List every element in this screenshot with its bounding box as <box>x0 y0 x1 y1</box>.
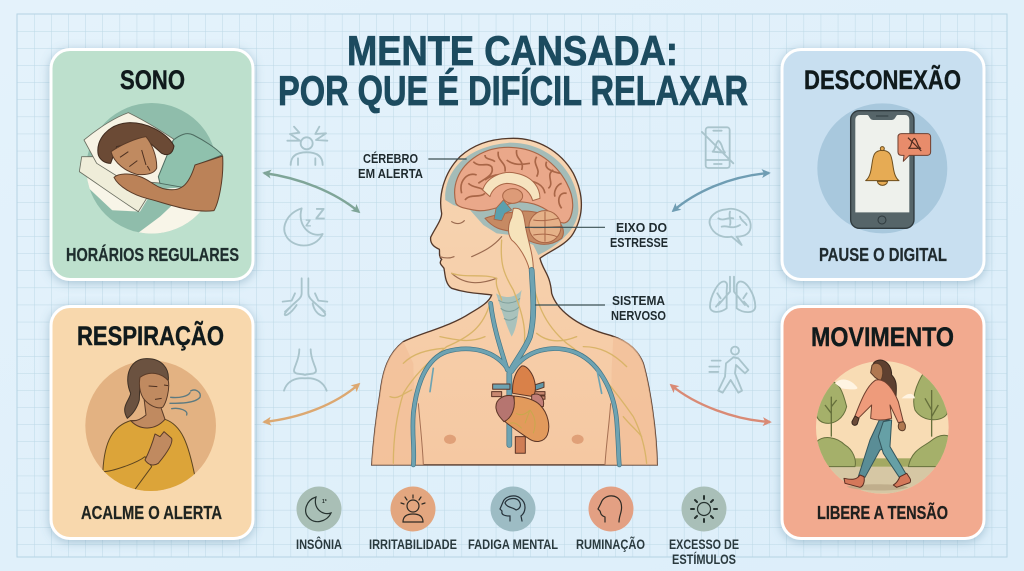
illustration: sleeping woman <box>79 103 227 240</box>
central anatomy figure <box>372 138 657 465</box>
heading: respiracao: RESPIRAÇÃO <box>77 320 224 351</box>
illustration: phone with muted bell <box>817 103 947 233</box>
panel: sono <box>51 50 253 280</box>
anatomy labels <box>358 151 668 323</box>
icon: nose <box>284 349 327 391</box>
icon: moon and zz: z <box>305 216 311 230</box>
symptom: irritabilidade <box>369 486 457 552</box>
face detail <box>440 221 502 283</box>
icon: airways <box>283 278 327 316</box>
symptom: insonia: 1* <box>322 499 327 505</box>
arm shading <box>372 337 657 465</box>
heading: sono: SONO <box>120 65 185 95</box>
anatomy labels: SISTEMA <box>612 294 665 308</box>
symptom: insonia <box>296 486 342 552</box>
nerves: blue trunks <box>413 270 619 465</box>
anatomy labels: CÉREBRO <box>363 151 418 166</box>
panel: desconexao <box>782 50 984 280</box>
symptom: insonia: INSÔNIA <box>296 537 342 552</box>
heart <box>492 366 549 453</box>
symptom: excesso de estimulos: ESTÍMULOS <box>672 552 736 567</box>
caption: acalme o alerta: ACALME O ALERTA <box>81 503 222 523</box>
nerves: yellow branches <box>390 240 647 463</box>
arrow: movimento to body <box>671 385 770 422</box>
heading: desconexao: DESCONEXÃO <box>804 64 961 95</box>
skull cavity <box>445 143 578 255</box>
leader lines <box>428 159 605 305</box>
trachea <box>496 290 522 337</box>
icon: moon and zz <box>284 204 325 245</box>
arrow: desconexao to head <box>673 173 769 211</box>
symptom: excesso de estimulos <box>669 486 739 567</box>
icon: lungs <box>710 277 755 312</box>
brain <box>455 147 573 269</box>
symptom: irritabilidade: IRRITABILIDADE <box>369 537 457 552</box>
caption: pause o digital: PAUSE O DIGITAL <box>819 245 947 265</box>
anatomy labels: ESTRESSE <box>610 236 668 250</box>
panel: respiracao <box>51 306 253 538</box>
anatomy labels: NERVOSO <box>611 309 666 323</box>
heading: movimento: MOVIMENTO <box>811 322 954 352</box>
faded icons: left column <box>283 127 327 391</box>
title <box>278 27 748 114</box>
nipples <box>444 435 584 444</box>
icon: moon and zz: Z <box>315 204 325 223</box>
anatomy labels: EM ALERTA <box>358 167 423 181</box>
icon: stressed person <box>287 127 327 165</box>
caption: horarios regulares: HORÁRIOS REGULARES <box>66 244 239 265</box>
caption: libere a tensao: LIBERE A TENSÃO <box>817 502 948 523</box>
symptom: ruminacao: RUMINAÇÃO <box>576 537 645 552</box>
title: MENTE CANSADA: <box>347 27 678 74</box>
panel: movimento <box>782 306 984 538</box>
anatomy labels: EIXO DO <box>616 221 667 235</box>
symptom: fadiga mental: FADIGA MENTAL <box>468 537 558 552</box>
title: POR QUE É DIFÍCIL RELAXAR <box>278 67 748 114</box>
faded icons: right column <box>702 127 755 393</box>
arrow: respiracao to body <box>264 384 359 422</box>
body silhouette <box>372 138 657 465</box>
symptom: fadiga mental <box>468 486 558 552</box>
illustration: breathing woman <box>85 359 216 503</box>
icon: brain <box>710 209 751 245</box>
arrow: sono to head <box>264 173 359 212</box>
icon: walking person <box>709 347 748 393</box>
symptom: ruminacao <box>576 486 645 552</box>
illustration: walking woman <box>813 360 953 494</box>
symptom: excesso de estimulos: EXCESSO DE <box>669 537 739 552</box>
icon: phone muted <box>702 127 733 168</box>
